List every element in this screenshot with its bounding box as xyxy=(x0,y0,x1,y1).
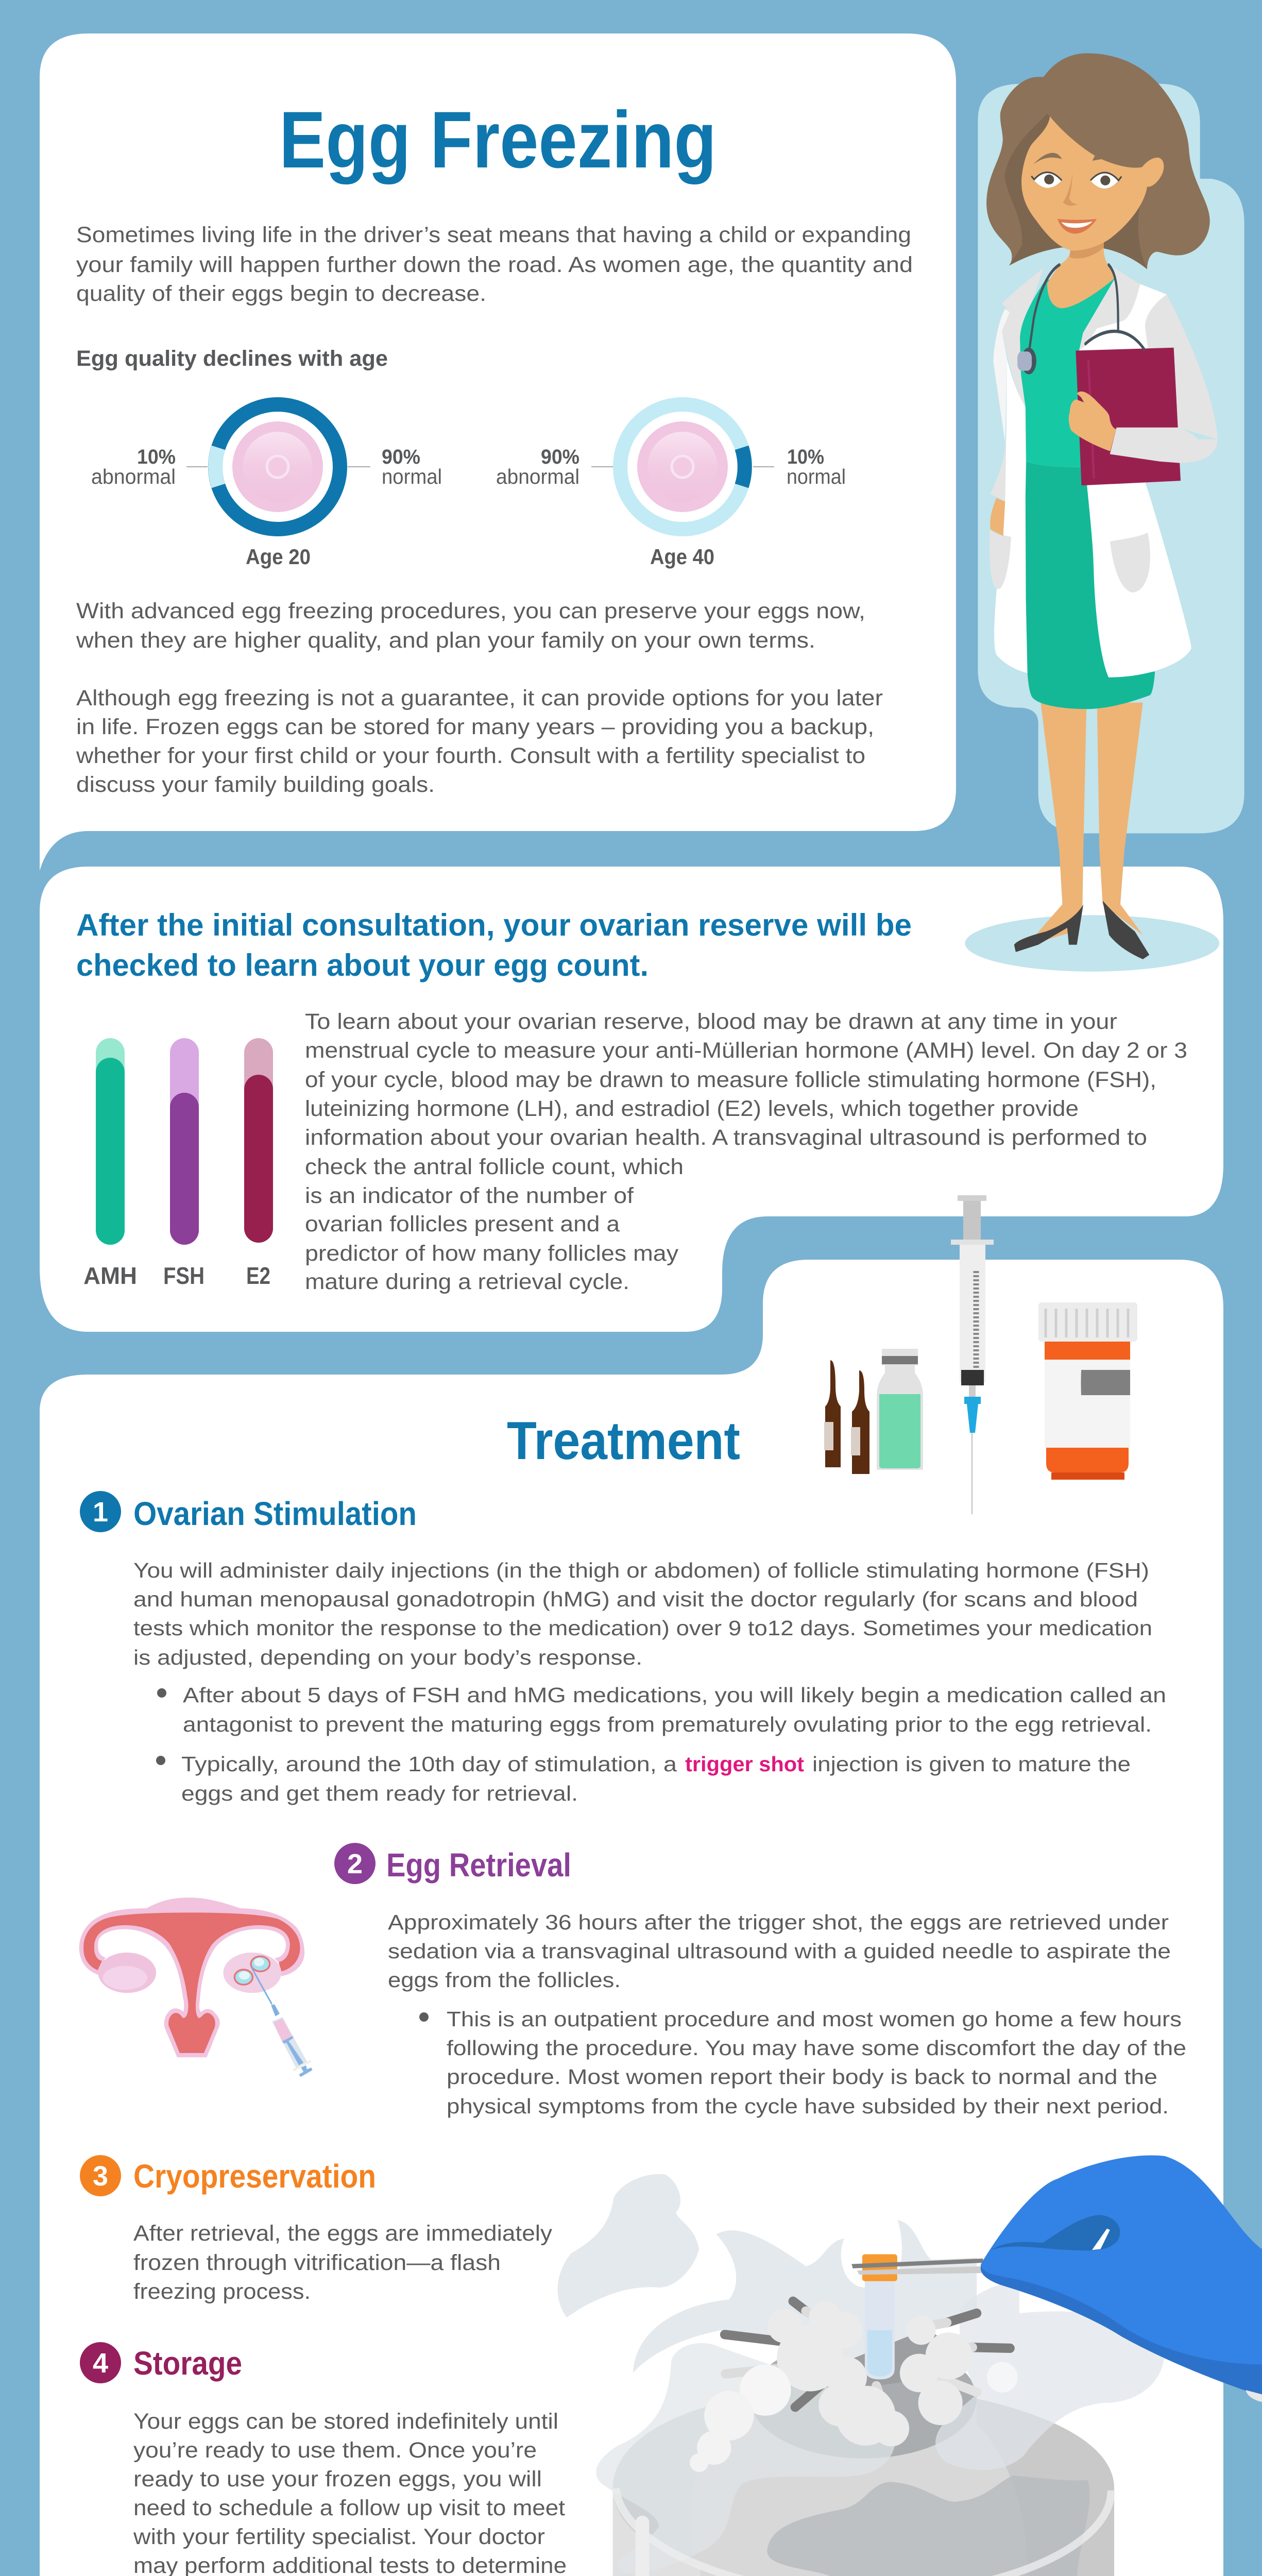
tweezers xyxy=(851,2259,983,2275)
chart: age 40 donut: 10% xyxy=(787,446,824,468)
coat right panel xyxy=(1087,482,1191,677)
step 2 bullet: This is an outpatient procedure and most women go home a few hours xyxy=(447,2007,1182,2031)
step 3 heading: Cryopreservation xyxy=(133,2158,376,2195)
smoke: central plume xyxy=(633,2220,977,2373)
right lapel xyxy=(1079,265,1140,351)
intro paragraph xyxy=(76,223,913,306)
leg right xyxy=(1097,703,1143,935)
left hand xyxy=(990,498,1006,536)
smoke: right plume xyxy=(935,2279,1165,2470)
paragraph: ovarian reserve: information about your ovarian health. A transvaginal ultrasound is performed to xyxy=(305,1125,1147,1150)
bar chart: hormones xyxy=(83,1038,273,1289)
heading: After the initial consultation, your ovarian reserve will be xyxy=(76,908,912,942)
title: Egg Freezing xyxy=(279,95,717,185)
tank opening xyxy=(780,2317,947,2386)
coat left panel xyxy=(994,360,1033,674)
step 2 paragraph xyxy=(388,1910,1171,1992)
coat left sleeve grey xyxy=(991,436,1007,501)
tank neck xyxy=(751,2339,977,2459)
paragraph: ovarian reserve: mature during a retrieval cycle. xyxy=(305,1269,629,1294)
step 3 heading: 3 xyxy=(93,2161,108,2192)
icon: ampoules xyxy=(824,1360,869,1474)
bar chart: hormones: E2 xyxy=(246,1262,270,1289)
bar chart: hormones: FSH xyxy=(163,1262,204,1289)
paragraph: ovarian reserve: luteinizing hormone (LH), and estradiol (E2) levels, which together provide xyxy=(305,1096,1079,1121)
illustration: stethoscope xyxy=(1017,265,1144,374)
leg left xyxy=(1026,703,1086,946)
sample tube xyxy=(862,2254,897,2379)
step 1 paragraph: You will administer daily injections (in the thigh or abdomen) of follicle stimulating hormone (FSH) xyxy=(133,1558,1149,1582)
tank highlight ring xyxy=(616,2488,1111,2576)
tank body xyxy=(613,2488,1114,2576)
heading xyxy=(76,908,912,982)
uterus body xyxy=(83,1912,300,2053)
step 1 heading: Ovarian Stimulation xyxy=(133,1495,417,1532)
tank dome side xyxy=(977,2399,1114,2569)
step 2 bullet: following the procedure. You may have some discomfort the day of the xyxy=(447,2036,1186,2060)
right pocket xyxy=(1110,533,1150,592)
heading: treatment: Treatment xyxy=(507,1411,740,1471)
neck xyxy=(1047,241,1116,308)
icon: syringe xyxy=(951,1195,994,1514)
step 1 bullets: injection is given to mature the xyxy=(812,1752,1131,1776)
step 4 paragraph xyxy=(133,2409,567,2576)
paragraph: ovarian reserve: ovarian follicles present and a xyxy=(305,1212,620,1236)
step 1 paragraph xyxy=(133,1558,1152,1669)
step 1 paragraph: tests which monitor the response to the medication) over 9 to12 days. Sometimes your medication xyxy=(133,1616,1152,1640)
panel: introduction xyxy=(40,33,956,871)
shoes xyxy=(1014,901,1149,959)
step 3 paragraph xyxy=(133,2221,553,2304)
tank dome xyxy=(613,2397,1114,2576)
ice vapour xyxy=(690,2301,1018,2472)
step 2 paragraph: eggs from the follicles. xyxy=(388,1968,621,1992)
step 2 bullet: physical symptoms from the cycle have subsided by their next period. xyxy=(447,2094,1169,2118)
step 4 paragraph: with your fertility specialist. Your doctor xyxy=(133,2524,545,2549)
step 2 heading xyxy=(334,1843,571,1884)
step 1 bullets: Typically, around the 10th day of stimulation, a xyxy=(181,1752,677,1776)
face xyxy=(1021,116,1164,250)
illustration: doctor face xyxy=(1021,116,1164,308)
step 4 heading xyxy=(80,2342,242,2383)
paragraph: preserve eggs: when they are higher quality, and plan your family on your own terms. xyxy=(76,628,815,653)
dress skirt xyxy=(1026,462,1155,709)
right ovary with follicles xyxy=(223,1953,281,1993)
mouth xyxy=(1058,219,1097,234)
illustration: doctor body xyxy=(990,265,1218,709)
step 2 bullet xyxy=(419,2007,1186,2118)
step 2 paragraph: sedation via a transvaginal ultrasound with a guided needle to aspirate the xyxy=(388,1939,1171,1963)
tank dome left shade xyxy=(613,2397,751,2565)
paragraph: options xyxy=(76,686,883,797)
tank highlight side marks xyxy=(634,2522,651,2576)
heading: checked to learn about your egg count. xyxy=(76,948,649,982)
step 2 heading: Egg Retrieval xyxy=(386,1846,571,1884)
coat left sleeve light xyxy=(993,309,1010,442)
paragraph: ovarian reserve: is an indicator of the number of xyxy=(305,1183,634,1208)
paragraph: options: whether for your first child or your fourth. Consult with a fertility specialist to xyxy=(76,743,865,768)
step 2 heading: 2 xyxy=(347,1849,363,1879)
paragraph: ovarian reserve: predictor of how many follicles may xyxy=(305,1241,679,1266)
chart: age 20 donut: abnormal xyxy=(91,465,176,488)
gloved hand xyxy=(981,2155,1262,2402)
chart: age 40 donut: Age 40 xyxy=(650,545,714,569)
chart heading: Egg quality declines with age xyxy=(76,346,388,371)
paragraph: ovarian reserve xyxy=(305,1009,1187,1294)
forearm sleeve xyxy=(1110,428,1218,463)
coat shoulder xyxy=(1079,284,1167,351)
chart: age 40 donut: 90% xyxy=(541,446,579,468)
doctor hand xyxy=(1069,392,1116,451)
step 2 paragraph: Approximately 36 hours after the trigger shot, the eggs are retrieved under xyxy=(388,1910,1169,1934)
left lapel xyxy=(1002,268,1044,406)
step 4 paragraph: ready to use your frozen eggs, you will xyxy=(133,2467,542,2492)
intro paragraph: Sometimes living life in the driver’s seat means that having a child or expanding xyxy=(76,223,911,247)
coat right sleeve xyxy=(1145,294,1218,439)
retrieval syringe xyxy=(251,1967,313,2077)
step 4 heading: Storage xyxy=(133,2345,242,2382)
step 4 paragraph: you’re ready to use them. Once you’re xyxy=(133,2438,537,2463)
step 1 paragraph: is adjusted, depending on your body’s response. xyxy=(133,1646,642,1669)
bar chart: hormones: AMH xyxy=(83,1262,137,1289)
paragraph: options: discuss your family building goals. xyxy=(76,772,435,797)
illustration: liquid nitrogen tank with sample xyxy=(558,2155,1262,2576)
brows xyxy=(1033,153,1102,165)
panel: ovarian reserve xyxy=(40,867,1223,1332)
step 3 paragraph: freezing process. xyxy=(133,2279,311,2304)
step 1 bullets: After about 5 days of FSH and hMG medications, you will likely begin a medication called an xyxy=(183,1683,1166,1707)
step 1 bullets xyxy=(156,1683,1166,1805)
step 1 paragraph: and human menopausal gonadotropin (hMG) and visit the doctor regularly (for scans and blood xyxy=(133,1587,1138,1611)
paragraph: options: Although egg freezing is not a guarantee, it can provide options for you later xyxy=(76,686,883,710)
step 4 heading: 4 xyxy=(93,2348,108,2379)
step 1 bullets: trigger shot xyxy=(685,1752,804,1776)
clipboard xyxy=(1076,348,1181,485)
left pocket xyxy=(990,530,1011,589)
chart: age 40 donut: abnormal xyxy=(496,465,579,488)
chart: age 20 donut xyxy=(91,404,442,569)
grey blob on tank xyxy=(767,2476,1109,2576)
storage canes xyxy=(725,2301,1010,2412)
nose xyxy=(1063,173,1078,206)
step 1 bullets: antagonist to prevent the maturing eggs from prematurely ovulating prior to the egg retrieval. xyxy=(183,1713,1152,1736)
paragraph: ovarian reserve: of your cycle, blood may be drawn to measure follicle stimulating hormone (FSH), xyxy=(305,1067,1156,1092)
left ovary xyxy=(98,1953,156,1993)
step 3 paragraph: After retrieval, the eggs are immediately xyxy=(133,2221,553,2246)
step 3 heading xyxy=(80,2155,376,2196)
panel: doctor backdrop xyxy=(978,84,1244,833)
intro paragraph: your family will happen further down the road. As women age, the quantity and xyxy=(76,252,913,277)
smoke: lower left plume xyxy=(596,2343,897,2573)
step 4 paragraph: need to schedule a follow up visit to meet xyxy=(133,2496,565,2520)
chart: age 40 donut xyxy=(496,404,846,569)
step 3 paragraph: frozen through vitrification—a flash xyxy=(133,2250,501,2275)
dress top xyxy=(1020,277,1116,467)
eyes xyxy=(1031,172,1121,189)
illustration: doctor hair and head xyxy=(986,53,1210,269)
paragraph: ovarian reserve: check the antral follicle count, which xyxy=(305,1155,684,1179)
icon: uterus with retrieval needle xyxy=(79,1897,313,2077)
floor ellipse xyxy=(965,915,1219,972)
chart: age 20 donut: 10% xyxy=(137,446,176,468)
step 1 bullets: eggs and get them ready for retrieval. xyxy=(181,1782,578,1805)
icon: pill bottle xyxy=(1038,1302,1137,1480)
paragraph: ovarian reserve: To learn about your ovarian reserve, blood may be drawn at any time in your xyxy=(305,1009,1117,1034)
paragraph: preserve eggs xyxy=(76,599,865,653)
uterus outline xyxy=(79,1897,304,2057)
panel: treatment xyxy=(40,1260,1223,2576)
intro paragraph: quality of their eggs begin to decrease. xyxy=(76,281,486,306)
step 4 paragraph: Your eggs can be stored indefinitely until xyxy=(133,2409,558,2434)
paragraph: options: in life. Frozen eggs can be stored for many years – providing you a backup, xyxy=(76,715,874,739)
neck shadow xyxy=(1070,241,1104,259)
doctor hair xyxy=(986,53,1210,269)
step 2 bullet: procedure. Most women report their body is back to normal and the xyxy=(447,2065,1157,2089)
smoke: left plume xyxy=(558,2174,699,2317)
step 1 heading: 1 xyxy=(93,1497,108,1528)
paragraph: preserve eggs: With advanced egg freezing procedures, you can preserve your eggs now, xyxy=(76,599,865,623)
chart: age 40 donut: normal xyxy=(787,465,846,488)
clipboard strip xyxy=(1088,361,1094,477)
icon: vial xyxy=(877,1349,923,1470)
chart: age 20 donut: Age 20 xyxy=(246,545,311,569)
chart: age 20 donut: normal xyxy=(382,465,442,488)
doctor hair shadow xyxy=(1004,113,1147,269)
chart: age 20 donut: 90% xyxy=(382,446,420,468)
icon: medications xyxy=(824,1195,1137,1514)
paragraph: ovarian reserve: menstrual cycle to measure your anti-Müllerian hormone (AMH) level. On day 2 or 3 xyxy=(305,1038,1187,1063)
illustration: doctor legs and shoes xyxy=(965,703,1219,972)
